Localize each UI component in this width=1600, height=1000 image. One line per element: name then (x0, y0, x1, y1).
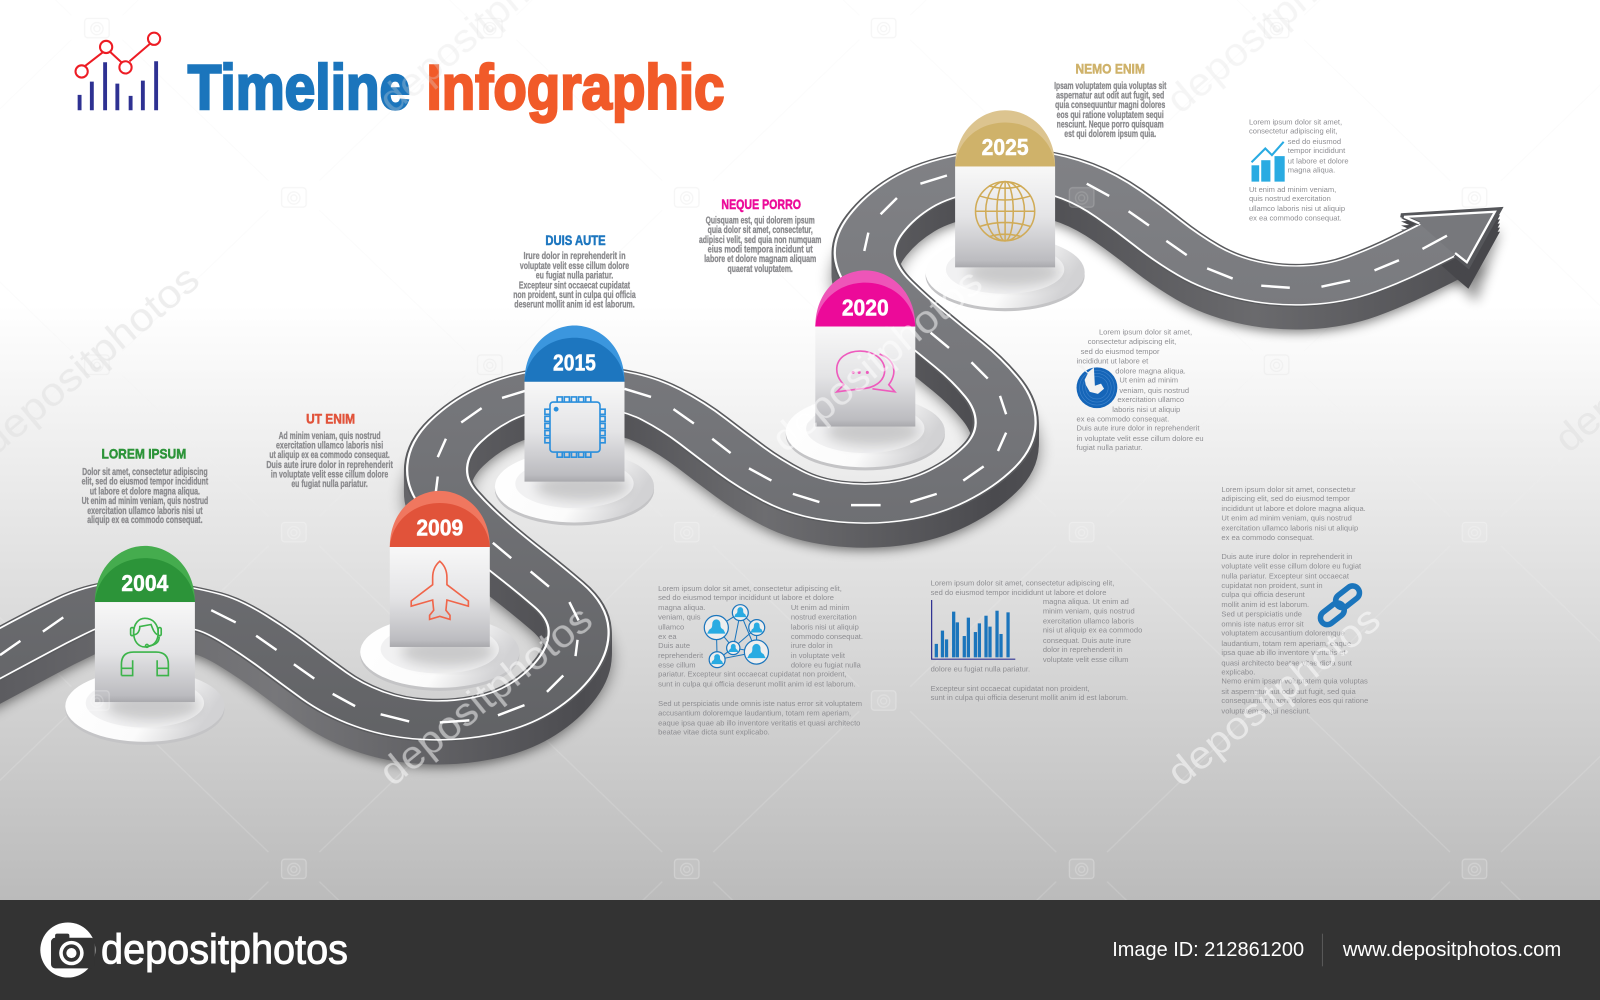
icon: chat bubbles (837, 351, 895, 392)
side note: people network: ullamco (658, 623, 684, 632)
marker: 2020 (815, 270, 915, 427)
side note: chain link: Duis aute irure dolor in reprehenderit in (1221, 552, 1352, 561)
marker: 2015 (524, 326, 624, 482)
side note: chain link: consequuntur magni dolores eos qui ratione (1221, 696, 1368, 705)
text block: Ut Enim (266, 411, 393, 490)
side note: people network: esse cillum (658, 660, 695, 669)
side note: people network: Duis aute (658, 641, 690, 650)
side note: chain link (1221, 485, 1368, 715)
marker: 2004 (95, 546, 195, 702)
year: 2025 (982, 134, 1029, 160)
side note: chain link: exercitation ullamco laboris nisi ut aliquip (1221, 524, 1358, 533)
side note: chain link: ipsa quae ab illo inventore veritatis et (1221, 648, 1347, 657)
lane dashes (0, 176, 1447, 722)
text block: Duis Aute: Irure dolor in reprehenderit in (523, 251, 626, 262)
side note: people network: pariatur. Excepteur sint occaecat cupidatat non proident, (658, 670, 847, 679)
icon: headset agent (121, 618, 168, 676)
side note: growth chart: ullamco laboris nisi ut aliquip (1249, 204, 1345, 213)
text block: Ut Enim: in voluptate velit esse cillum dolore (271, 470, 389, 481)
text block: Ut Enim: eu fugiat nulla pariatur. (291, 479, 368, 490)
side note: growth chart: sed do eiusmod (1288, 137, 1341, 146)
side note: people network: in voluptate velit (791, 651, 846, 660)
title (188, 53, 724, 123)
year: 2009 (416, 515, 463, 541)
marker body (524, 382, 624, 482)
side note: chain link: cupidatat non proident, sunt in (1221, 581, 1323, 590)
text block: Duis Aute: deserunt mollit anim id est laborum. (514, 300, 635, 311)
side note: people network: Ut enim ad minim (791, 603, 850, 612)
side note: chain link: omnis iste natus error sit (1221, 620, 1305, 629)
base disk: 2009 (360, 616, 519, 691)
text block: Lorem Ipsum: LOREM IPSUM (102, 447, 186, 463)
footer logo: depositphotos (101, 925, 348, 972)
side note: radial chart: in voluptate velit esse cillum dolore eu (1077, 434, 1204, 443)
year: 2020 (842, 294, 889, 320)
side note: radial chart: Ut enim ad minim (1119, 376, 1178, 385)
dome header (955, 110, 1055, 166)
marker body (815, 327, 915, 427)
side note: people network: Lorem ipsum dolor sit amet, consectetur adipiscing elit, (658, 584, 842, 593)
text block: Nemo Enim: est qui dolorem ipsum quia. (1064, 129, 1156, 140)
text block: Nemo Enim: Ipsam voluptatem quia voluptas sit (1054, 81, 1167, 92)
side note: growth chart: ex ea commodo consequat. (1249, 213, 1342, 222)
side note: chain link: adipiscing elit, sed do eiusmod tempor (1221, 494, 1350, 503)
bar chart (932, 600, 1015, 659)
text block: Nemo Enim: quia consequuntur magni dolores (1055, 100, 1166, 111)
text block: Lorem Ipsum: elit, sed do eiusmod tempor incididunt (82, 477, 209, 488)
text block: Nemo Enim: aspernatur aut odit aut fugit, sed (1056, 90, 1164, 101)
side note: bar chart: Excepteur sint occaecat cupidatat non proident, (931, 684, 1090, 693)
side note: growth chart: consectetur adipiscing elit, (1249, 127, 1337, 136)
base disk: 2004 (65, 670, 224, 745)
side note: bar chart: minim veniam, quis nostrud (1043, 606, 1135, 615)
title icon: chart with trend line (76, 33, 160, 110)
text block: Nemo Enim (1054, 61, 1167, 140)
base disk: 2020 (786, 396, 945, 470)
side note: bar chart: consequat. Duis aute irure (1043, 636, 1131, 645)
marker body (390, 547, 490, 647)
side note: chain link: voluptatem accusantium doloremque (1221, 629, 1345, 638)
side note: radial chart: Lorem ipsum dolor sit amet, (1099, 328, 1192, 337)
watermark wordmarks: depositphotos (1159, 598, 1388, 795)
footer bar (0, 900, 1600, 1000)
winding road with arrow (0, 169, 1500, 747)
side note: radial chart: consectetur adipiscing elit, (1088, 337, 1176, 346)
text block: Nemo Enim: nesciunt. Neque porro quisquam (1057, 120, 1164, 131)
text block: Ut Enim: ut aliquip ex ea commodo consequat. (269, 450, 390, 461)
side note: growth chart: Ut enim ad minim veniam, (1249, 185, 1336, 194)
side note: bar chart: dolor in reprehenderit in (1043, 645, 1123, 654)
text block: Nemo Enim: eos qui ratione voluptatem sequi (1057, 110, 1164, 121)
side note: growth chart: quis nostrud exercitation (1249, 194, 1331, 203)
text block: Lorem Ipsum (82, 447, 209, 526)
text block: Ut Enim: exercitation ullamco laboris nisi (276, 440, 383, 451)
side note: people network: irure dolor in (791, 641, 833, 650)
dome header (390, 491, 490, 547)
watermark wordmarks: depositphotos (371, 598, 601, 795)
side note: radial chart: fugiat nulla pariatur. (1077, 443, 1142, 452)
text block: Neque Porro: NEQUE PORRO (721, 197, 801, 213)
icon: radial chart (1077, 365, 1117, 408)
side note: people network: dolore eu fugiat nulla (791, 660, 862, 669)
marker: 2009 (390, 491, 490, 647)
side note: people network: ex ea (658, 632, 677, 641)
side note: chain link: ex ea commodo consequat. (1221, 533, 1314, 542)
side note: chain link: Lorem ipsum dolor sit amet, consectetur (1221, 485, 1356, 494)
side note: chain link: sit aspernatur aut odit aut fugit, sed quia (1221, 687, 1356, 696)
text block: Lorem Ipsum: aliquip ex ea commodo consequat. (87, 515, 203, 526)
text block: Ut Enim: UT ENIM (306, 411, 355, 427)
text block: Nemo Enim: NEMO ENIM (1076, 61, 1145, 77)
side note: radial chart: veniam, quis nostrud (1119, 386, 1189, 395)
base disk: 2025 (926, 237, 1085, 311)
side note: chain link: voluptatem sequi nesciunt. (1221, 706, 1311, 715)
side note: chain link: voluptate velit esse cillum dolore eu fugiat (1221, 561, 1362, 570)
text block: Duis Aute: Excepteur sint occaecat cupidatat (519, 280, 631, 291)
text block: Neque Porro: quia dolor sit amet, consectetur, (708, 225, 813, 236)
side note: people network: nostrud exercitation (791, 612, 857, 621)
side note: bar chart: sunt in culpa qui officia deserunt mollit anim id est laborum. (931, 693, 1128, 702)
text block: Duis Aute (513, 233, 636, 311)
watermark wordmarks (0, 0, 1600, 795)
dome header (95, 546, 195, 602)
side note: chain link: culpa qui officia deserunt (1221, 590, 1306, 599)
icon: people network (704, 605, 768, 668)
site url: www.depositphotos.com (1342, 939, 1561, 961)
marker: 2025 (955, 110, 1055, 267)
year: 2015 (553, 349, 596, 375)
icon: globe (976, 182, 1035, 241)
side note: bar chart: magna aliqua. Ut enim ad (1043, 597, 1129, 606)
title: Infographic (427, 53, 724, 123)
footer logo (40, 922, 348, 978)
icon: airplane (411, 561, 468, 619)
side note: chain link: Sed ut perspiciatis unde (1221, 609, 1302, 618)
side note: radial chart: dolore magna aliqua. (1115, 366, 1186, 375)
arrow head (1401, 209, 1500, 266)
title: Timeline (188, 53, 410, 123)
text block: Lorem Ipsum: exercitation ullamco laboris nisi ut (87, 506, 203, 517)
dome header (524, 326, 624, 382)
side note: people network: commodo consequat. (791, 632, 863, 641)
side note: growth chart: magna aliqua. (1288, 165, 1335, 174)
side note: chain link: mollit anim id est laborum. (1221, 600, 1309, 609)
text block: Neque Porro: labore et dolore magnam aliquam (704, 254, 817, 265)
text block: Neque Porro: quaerat voluptatem. (728, 264, 793, 275)
side note: radial chart: exercitation ullamco (1117, 395, 1184, 404)
side note: chain link: nulla pariatur. Excepteur sint occaecat (1221, 572, 1350, 581)
side note: bar chart: dolore eu fugiat nulla pariatur. (931, 664, 1030, 673)
icon: growth bars (1252, 142, 1285, 182)
image id: Image ID: 212861200 (1112, 939, 1304, 961)
side note: chain link: Ut enim ad minim veniam, quis nostrud (1221, 513, 1352, 522)
side note: people network: sed do eiusmod tempor incididunt ut labore et dolore (658, 593, 834, 602)
text block: Lorem Ipsum: Ut enim ad minim veniam, quis nostrud (82, 496, 208, 507)
side note: bar chart: nisi ut aliquip ex ea commodo (1043, 626, 1142, 635)
side note: bar chart: voluptate velit esse cillum (1043, 655, 1128, 664)
side note: radial chart: laboris nisi ut aliquip (1112, 405, 1180, 414)
side note: chain link: Nemo enim ipsam voluptatem quia voluptas (1221, 677, 1368, 686)
side note: people network: reprehenderit (658, 651, 704, 660)
side note: growth chart: tempor incididunt (1288, 146, 1346, 155)
side note: chain link: explicabo. (1221, 667, 1255, 676)
side note: people network: magna aliqua. (658, 603, 706, 612)
side note: bar chart: exercitation ullamco laboris (1043, 616, 1134, 625)
side note: chain link: laudantium, totam rem aperiam, eaque (1221, 639, 1351, 648)
side note: bar chart (931, 579, 1142, 702)
marker body (955, 166, 1055, 267)
dome header (815, 270, 915, 327)
side note: radial chart: sed do eiusmod tempor (1081, 347, 1160, 356)
icon: chain link (1315, 583, 1365, 627)
base disk: 2015 (495, 451, 654, 526)
side note: people network: laboris nisi ut aliquip (791, 623, 859, 632)
side note: people network: eaque ipsa quae ab illo inventore veritatis et quasi architecto (658, 719, 860, 728)
watermark camera marks (85, 18, 1487, 879)
text block: Duis Aute: eu fugiat nulla pariatur. (536, 271, 613, 282)
side note: people network (658, 584, 863, 737)
text block: Neque Porro: adipisci velit, sed quia non numquam (699, 235, 822, 246)
side note: growth chart (1249, 117, 1349, 222)
side note: radial chart: ex ea commodo consequat. (1077, 414, 1169, 423)
marker body (95, 602, 195, 702)
side note: people network: beatae vitae dicta sunt explicabo. (658, 728, 770, 737)
text block: Neque Porro: Quisquam est, qui dolorem ipsum (706, 215, 815, 226)
side note: bar chart: Lorem ipsum dolor sit amet, consectetur adipiscing elit, (931, 579, 1114, 588)
text block: Duis Aute: DUIS AUTE (545, 233, 606, 249)
side note: growth chart: ut labore et dolore (1288, 156, 1349, 165)
side note: radial chart (1077, 328, 1204, 452)
text block: Duis Aute: non proident, sunt in culpa qui officia (513, 290, 636, 301)
text block: Neque Porro (699, 197, 822, 275)
side note: chain link: incididunt ut labore et dolore magna aliqua. (1221, 504, 1366, 513)
side note: people network: veniam, quis (658, 612, 701, 621)
text block: Ut Enim: Duis aute irure dolor in reprehenderit (266, 460, 393, 471)
side note: radial chart: Duis aute irure dolor in reprehenderit (1077, 424, 1200, 433)
side note: bar chart: sed do eiusmod tempor incididunt ut labore et dolore (931, 588, 1106, 597)
text block: Ut Enim: Ad minim veniam, quis nostrud (279, 431, 381, 442)
side note: chain link: quasi architecto beatae vitae dicta sunt (1221, 658, 1353, 667)
text block: Duis Aute: voluptate velit esse cillum dolore (520, 261, 629, 272)
side note: people network: accusantium doloremque laudantium, totam rem aperiam, (658, 708, 851, 717)
text block: Lorem Ipsum: Dolor sit amet, consectetur adipiscing (82, 467, 208, 478)
side note: people network: sunt in culpa qui officia deserunt mollit anim id est laborum. (658, 680, 856, 689)
watermark wordmarks: depositphotos (764, 261, 991, 461)
side note: growth chart: Lorem ipsum dolor sit amet, (1249, 117, 1342, 126)
year: 2004 (121, 570, 168, 596)
text block: Neque Porro: eius modi tempora incidunt ut (708, 245, 813, 256)
side note: radial chart: incididunt ut labore et (1077, 356, 1149, 365)
side note: people network: Sed ut perspiciatis unde omnis iste natus error sit voluptatem (658, 699, 862, 708)
icon: processor chip (545, 397, 605, 457)
text block: Lorem Ipsum: ut labore et dolore magna aliqua. (90, 486, 200, 497)
